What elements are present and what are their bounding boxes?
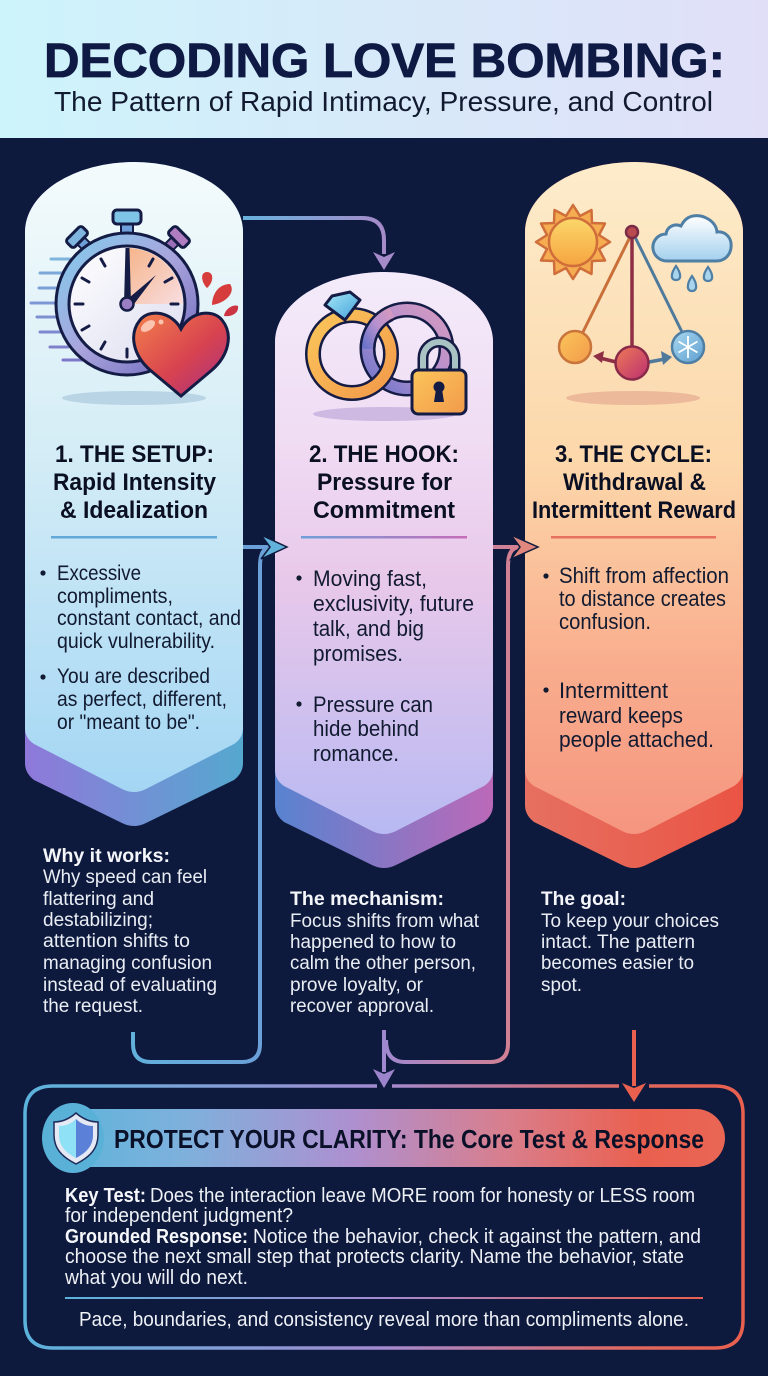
heading [532,441,736,524]
bullet list: romance. [313,741,399,766]
panel: protect your clarity [25,1086,743,1348]
icon: stopwatch and heart [31,210,238,405]
panel: step 3 the cycle [525,162,743,868]
text block: the goal: To keep your choices [541,911,719,932]
text block: key test and grounded response: choose the next small step that protects clarity. Name the behavior, state [65,1245,684,1268]
text block: the mechanism: happened to how to [290,932,456,953]
arrow: mechanism to step 3 [386,535,538,1062]
text block: why it works: Why it works: [43,845,170,867]
text block: why it works: Why speed can feel [43,867,207,888]
heading: & Idealization [60,497,208,524]
text block: the mechanism: Focus shifts from what [290,911,480,932]
header banner [0,0,768,138]
heading: 1. THE SETUP: [55,441,214,468]
heading: Withdrawal & [563,469,706,496]
heading: 3. THE CYCLE: [555,441,712,468]
panel: step 1 the setup [25,162,243,826]
icon: shield [54,1113,98,1164]
text block: why it works: managing confusion [43,953,212,974]
closing statement: Pace, boundaries, and consistency reveal more than compliments alone. [79,1308,689,1331]
text block: key test and grounded response: Grounded Response: [65,1225,248,1248]
text block: the mechanism: calm the other person, [290,953,476,974]
bullet list: constant contact, and [57,607,241,630]
text block: why it works [43,845,217,1017]
bullet list: promises. [313,641,403,666]
heading [53,441,216,524]
bullet list: confusion. [559,609,651,634]
banner pill [42,1103,725,1173]
bullet list: Pressure can [313,692,433,717]
bullet list: reward keeps [559,703,683,728]
text block: the mechanism: recover approval. [290,996,434,1017]
text block: why it works: instead of evaluating [43,975,217,996]
bullet list [543,563,729,752]
text block: why it works: the request. [43,996,143,1017]
bullet list: Excessive [57,562,141,585]
text block: the goal: spot. [541,975,582,996]
text block: key test and grounded response: for independent judgment? [65,1204,293,1227]
bullet list [296,566,474,766]
text block: why it works: destabilizing; [43,910,153,931]
bullet list: or "meant to be". [57,711,200,734]
text block: the goal [541,888,719,996]
text block: key test and grounded response: Does the interaction leave MORE room for honesty or LESS room [150,1184,695,1207]
text block: key test and grounded response [64,1184,701,1289]
heading: Intermittent Reward [532,497,736,524]
heading: Rapid Intensity [53,469,216,496]
arrow: why it works back to step 2 [133,535,287,1062]
text block: key test and grounded response: Key Test: [65,1184,146,1207]
bullet list: people attached. [559,727,714,752]
bullet list: as perfect, different, [57,688,227,711]
panel: step 2 the hook [275,272,493,868]
icon: rings and padlock [313,292,466,421]
icon: pendulum with sun and cloud [536,205,731,405]
banner pill: PROTECT YOUR CLARITY: The Core Test & Response [114,1124,704,1154]
title: DECODING LOVE BOMBING: [44,35,725,88]
text block: the mechanism: The mechanism: [290,888,444,910]
bullet list: quick vulnerability. [57,630,215,653]
text block: why it works: attention shifts to [43,931,190,952]
text block: the mechanism: prove loyalty, or [290,975,424,996]
text block: the mechanism [290,888,480,1017]
subtitle: The Pattern of Rapid Intimacy, Pressure, and Control [54,86,713,117]
text block: key test and grounded response: Notice the behavior, check it against the pattern, and [253,1225,701,1248]
bullet list: exclusivity, future [313,591,474,616]
bullet list: hide behind [313,716,419,741]
heading [309,441,459,524]
heading: Commitment [313,497,455,524]
text block: the goal: becomes easier to [541,953,694,974]
text block: the goal: The goal: [541,888,626,910]
bullet list: Shift from affection [559,563,729,588]
bullet list: Moving fast, [313,566,427,591]
heading: Pressure for [317,469,452,496]
arrow: goal down to clarity panel [622,1030,646,1102]
bullet list: to distance creates [559,586,726,611]
bullet list: compliments, [57,585,173,608]
bullet list: You are described [57,665,210,688]
arrow: step 1 to step 2 top [243,218,395,270]
bullet list [40,562,241,734]
text block: why it works: flattering and [43,889,154,910]
bullet list: talk, and big [313,616,424,641]
arrow: mechanism down to clarity panel [373,1030,395,1088]
text block: the goal: intact. The pattern [541,932,695,953]
bullet list: Intermittent [559,678,668,703]
heading: 2. THE HOOK: [309,441,459,468]
text block: key test and grounded response: what you will do next. [64,1266,248,1289]
